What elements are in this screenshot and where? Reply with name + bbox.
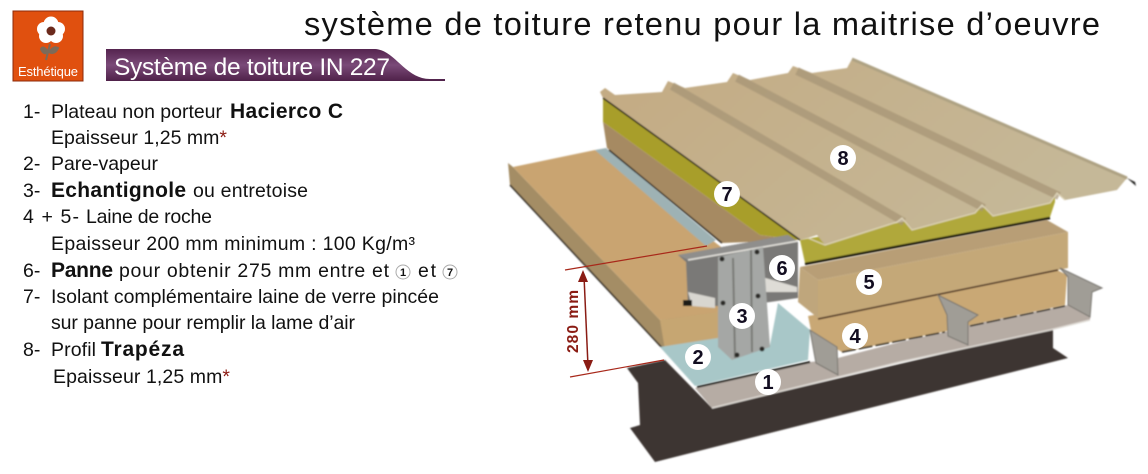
number callouts [685, 145, 882, 395]
legend list [23, 100, 457, 388]
steel beam [627, 328, 1068, 462]
legend item 6: pour obtenir 275 mm entre et [119, 260, 390, 282]
board 4 left [808, 290, 952, 352]
legend item 4 and 5 [23, 206, 212, 228]
left insulation board [508, 150, 725, 351]
legend item 8: Trapéza [101, 338, 184, 361]
inline reference 7: 7 [447, 267, 453, 279]
legend item 1 [23, 100, 343, 123]
callout 1 [755, 369, 781, 395]
dimension: 280 mm: 280 mm [565, 290, 582, 353]
inline reference 7 [443, 265, 457, 279]
legend item 2: Pare-vapeur [51, 153, 158, 175]
legend item 7: Isolant complémentaire laine de verre pincée [51, 286, 439, 308]
legend item 6: Panne [51, 259, 113, 282]
dimension: 280 mm [565, 246, 707, 377]
board 5 [798, 220, 1068, 319]
callout 8 [830, 145, 856, 171]
roof sheet [600, 59, 1136, 245]
callout 7: 7 [721, 184, 733, 206]
legend item 4 and 5: 4 + 5- [23, 206, 79, 228]
plateau grey [695, 292, 1092, 408]
callout 3 [729, 303, 755, 329]
icon: esthétique badge: Esthétique [18, 64, 78, 79]
inline reference 1 [396, 265, 410, 279]
legend item 3 [23, 179, 308, 202]
callout 4 [842, 323, 868, 349]
callout 7 [714, 181, 740, 207]
legend item 4 and 5: Laine de roche [86, 206, 212, 228]
legend item 8 [23, 338, 184, 361]
legend item 4 and 5 thickness: Epaisseur 200 mm minimum : 100 Kg/m³ [51, 233, 416, 255]
bracket [678, 235, 798, 360]
legend item 1 thickness: Epaisseur 1,25 mm* [51, 127, 227, 149]
legend item 8 thickness: Epaisseur 1,25 mm* [53, 366, 230, 388]
roof system diagram [508, 59, 1136, 462]
callout 2: 2 [692, 347, 704, 369]
title: système de toiture retenu pour la maitrise d’oeuvre [304, 5, 1100, 42]
legend item 8: 8- [23, 339, 40, 361]
yellow front [800, 195, 1055, 263]
inline reference 1: 1 [400, 267, 406, 279]
legend item 3: ou entretoise [193, 180, 308, 202]
inline et: et [418, 260, 437, 282]
callout 1: 1 [762, 372, 774, 394]
legend item 1: Plateau non porteur [51, 101, 222, 123]
legend item 2: 2- [23, 153, 40, 175]
clips [810, 268, 1102, 375]
banner: Système de toiture IN 227: Système de toiture IN 227 [114, 54, 390, 81]
legend item 3: Echantignole [51, 179, 186, 202]
legend item 1: Hacierco C [230, 100, 343, 123]
callout 6: 6 [776, 258, 788, 280]
legend item 3: 3- [23, 180, 40, 202]
legend item 1: 1- [23, 101, 40, 123]
callout 2 [685, 344, 711, 370]
legend item 6: 6- [23, 260, 40, 282]
callout 6 [769, 255, 795, 281]
callout 4: 4 [849, 326, 861, 348]
yellow side [603, 98, 800, 240]
callout 3: 3 [736, 306, 748, 328]
board 4 right [945, 270, 1067, 330]
vapour barrier [660, 303, 810, 386]
legend item 7 continued: sur panne pour remplir la lame d’air [51, 312, 356, 334]
callout 8: 8 [837, 148, 849, 170]
gutter strip [595, 148, 716, 246]
banner: Système de toiture IN 227 [106, 49, 445, 81]
legend item 7: 7- [23, 286, 40, 308]
icon: esthétique badge [13, 11, 83, 81]
callout 5 [856, 269, 882, 295]
legend item 8: Profil [51, 339, 96, 361]
brown side [603, 122, 800, 243]
callout 5: 5 [863, 272, 875, 294]
